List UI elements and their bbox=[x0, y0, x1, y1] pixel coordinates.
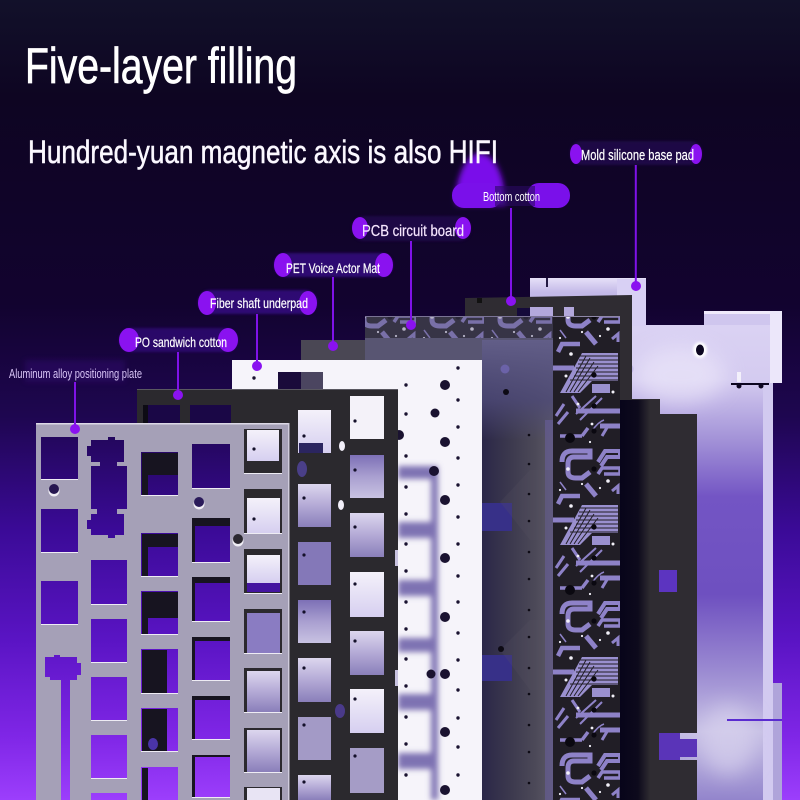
callout: aluminum alloy positioning plate: Aluminum alloy positioning plate bbox=[9, 366, 142, 381]
hole bottom highlights bbox=[41, 474, 282, 798]
callout: fiber shaft underpad bbox=[198, 290, 317, 371]
callout: PO sandwich cotton: PO sandwich cotton bbox=[135, 334, 227, 350]
callout: PET voice actor mat: PET Voice Actor Mat bbox=[286, 260, 380, 276]
callout: mold silicone base pad: Mold silicone base pad bbox=[581, 148, 694, 164]
subtitle: Hundred-yuan magnetic axis is also HIFI bbox=[28, 134, 498, 170]
layer: mold silicone base pad bbox=[530, 278, 782, 800]
screw holes bbox=[48, 484, 244, 750]
stabilizer cut-outs bbox=[45, 437, 127, 800]
layer: fiber shaft underpad bbox=[232, 360, 482, 800]
callout: bottom cotton bbox=[452, 183, 570, 306]
callout: aluminum alloy positioning plate bbox=[9, 360, 142, 434]
layer: PCB circuit board bbox=[365, 316, 620, 800]
callout: fiber shaft underpad: Fiber shaft underpad bbox=[210, 295, 308, 311]
purple glow behind HIFI bbox=[456, 153, 506, 205]
layer: PO sandwich cotton bbox=[137, 389, 398, 800]
dark cotton seen through third and fourth column holes bbox=[142, 453, 230, 800]
title: Five-layer filling bbox=[25, 38, 297, 94]
fifth column holes bbox=[244, 429, 282, 800]
callout: PET voice actor mat bbox=[274, 253, 393, 351]
callout: mold silicone base pad bbox=[570, 141, 702, 291]
callout: PCB circuit board: PCB circuit board bbox=[362, 223, 464, 240]
layer: aluminum alloy positioning plate bbox=[36, 423, 290, 800]
layer: PET voice actor mat bbox=[301, 338, 553, 800]
plate key holes bbox=[41, 437, 230, 800]
callout: bottom cotton: Bottom cotton bbox=[483, 190, 540, 204]
layer: bottom cotton bbox=[465, 295, 697, 800]
callout: PO sandwich cotton bbox=[119, 328, 238, 400]
callout: PCB circuit board bbox=[352, 216, 471, 330]
